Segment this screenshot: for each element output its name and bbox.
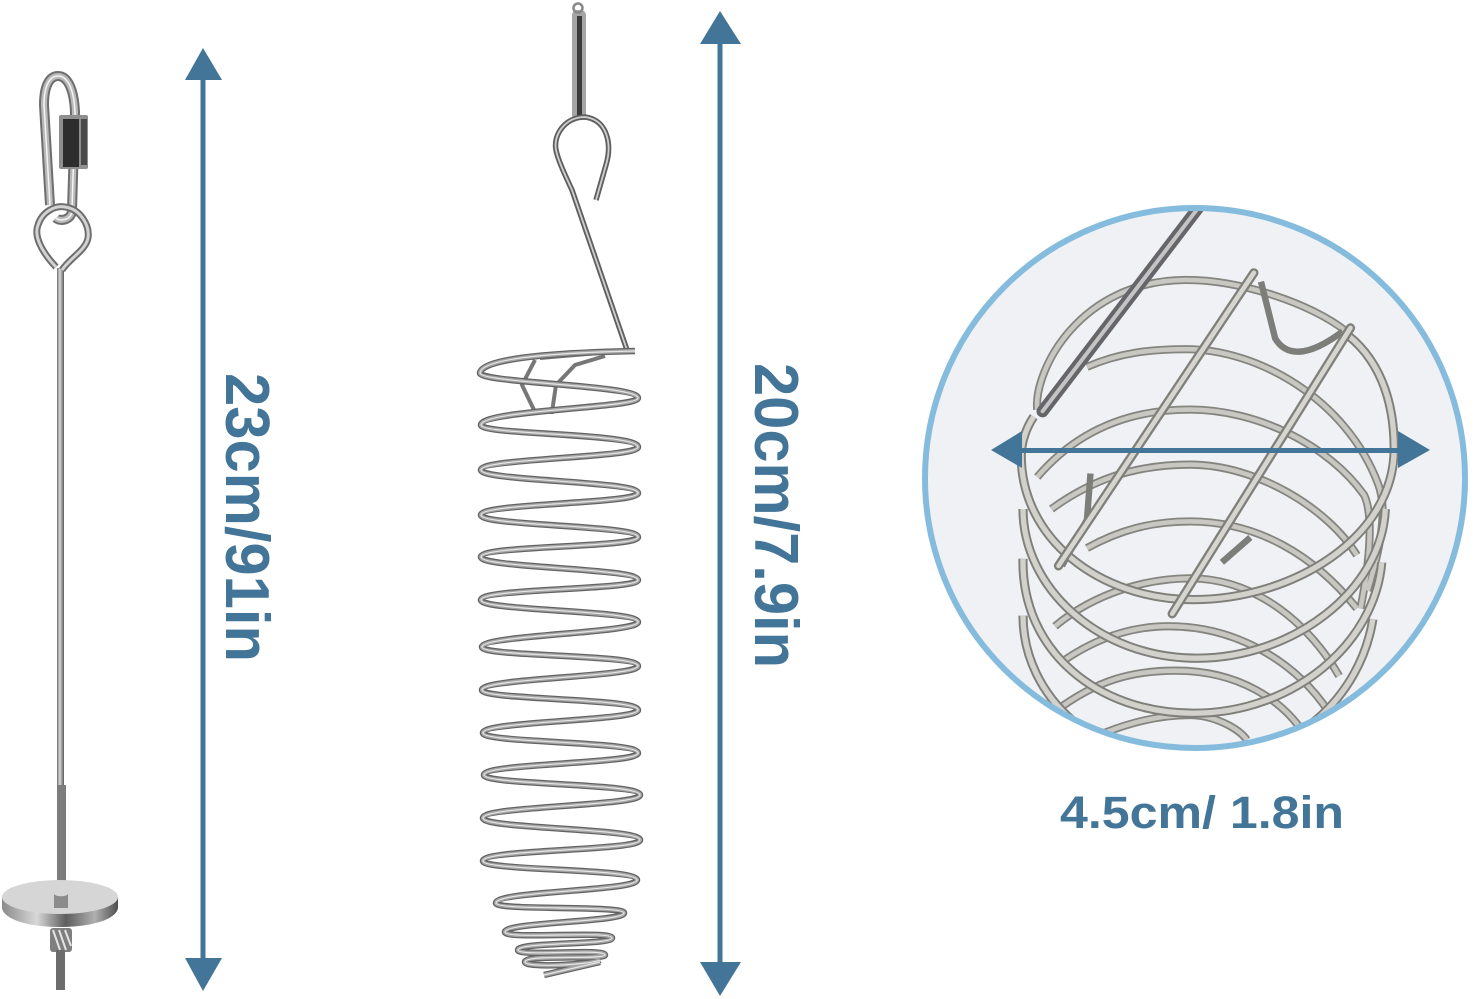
eye loop xyxy=(37,207,88,270)
lens ring xyxy=(925,208,1465,748)
rod shaft xyxy=(57,268,64,898)
label: 23cm/91in: 23cm/91in xyxy=(212,373,281,662)
threaded tip xyxy=(56,950,65,990)
wire bend xyxy=(1261,282,1343,352)
hanging hook xyxy=(556,117,627,350)
magnified coils xyxy=(1021,207,1394,765)
round disc base xyxy=(2,880,118,927)
top clip xyxy=(572,4,586,120)
disc collar xyxy=(54,894,68,908)
knurled nut xyxy=(50,928,72,952)
arrow: 4.5cm diameter xyxy=(991,431,1430,468)
stay rods xyxy=(1059,273,1351,614)
arrow: 20cm height xyxy=(700,11,741,996)
spring coils xyxy=(480,351,640,975)
carabiner link xyxy=(44,76,75,220)
arrow: 23cm height xyxy=(185,48,222,991)
inner stay wires xyxy=(522,352,610,412)
carabiner barrel xyxy=(59,115,88,169)
spiral feeder xyxy=(480,4,640,975)
threaded lower rod xyxy=(57,785,66,897)
label: 20cm/7.9in: 20cm/7.9in xyxy=(741,363,810,668)
magnified detail circle xyxy=(925,207,1465,765)
lens fill xyxy=(925,208,1465,748)
hook rod xyxy=(1043,207,1199,411)
skewer with carabiner and disc xyxy=(2,76,118,990)
label: 4.5cm/1.8in: 4.5cm/ 1.8in xyxy=(1060,787,1344,838)
